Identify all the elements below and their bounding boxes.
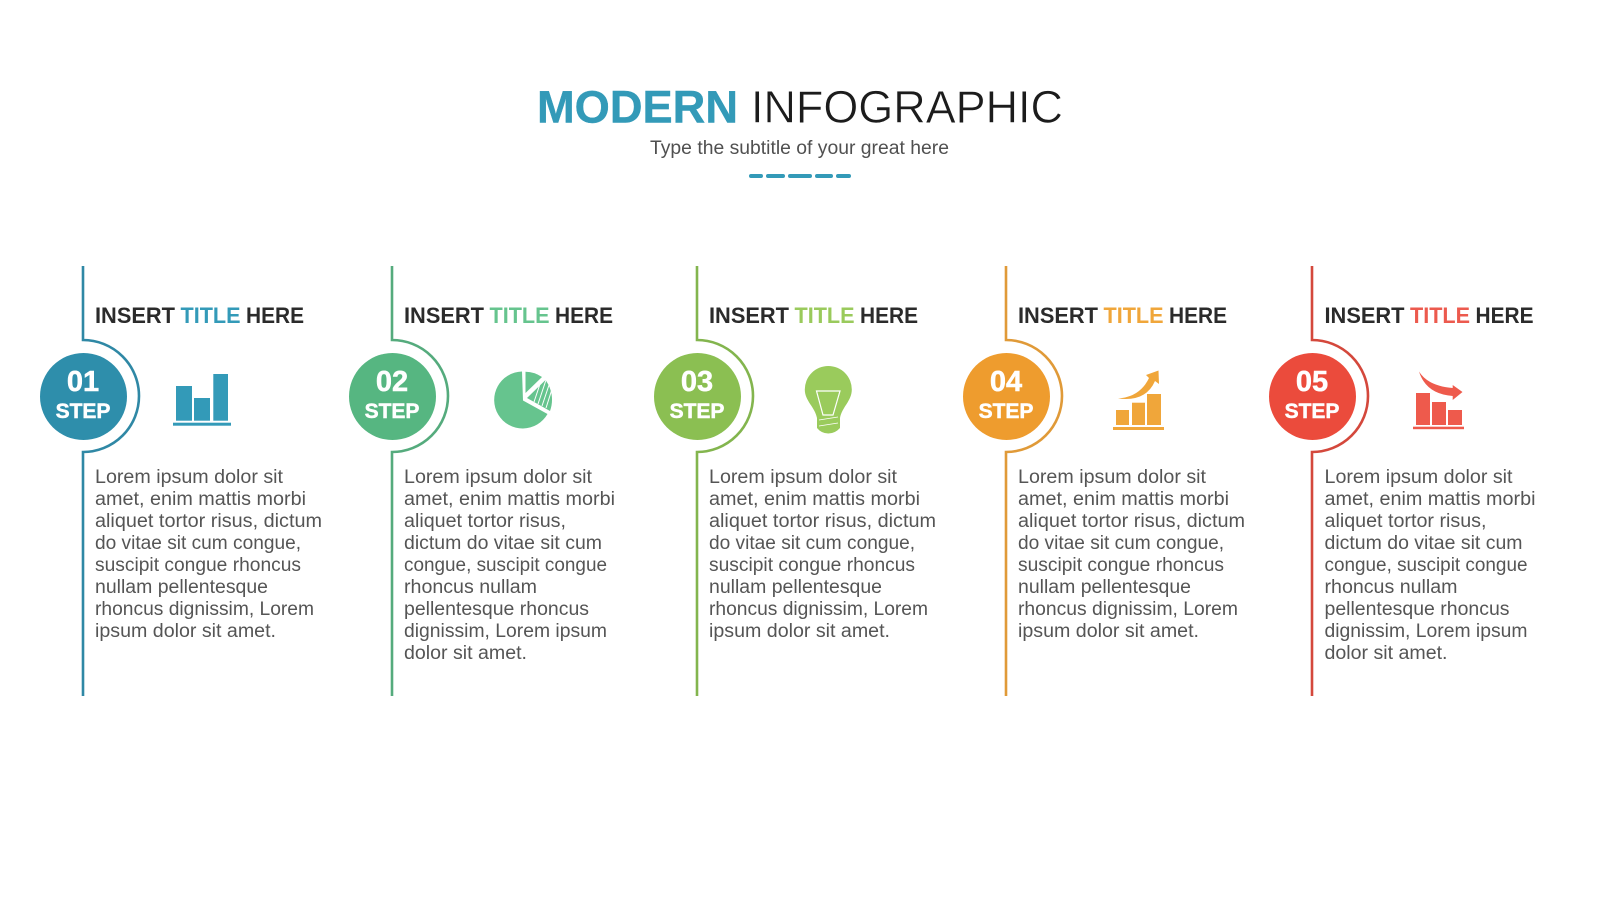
body text: dignissim, Lorem ipsum bbox=[1324, 621, 1528, 642]
step badge bbox=[1269, 353, 1356, 440]
icon: light bulb bbox=[805, 366, 852, 434]
panel: step 03 bbox=[654, 266, 936, 696]
body text: pellentesque rhoncus bbox=[404, 599, 589, 620]
step badge: 03 bbox=[681, 366, 713, 398]
icon: rising bar chart with arrow bbox=[1113, 370, 1164, 430]
panel: step 02 bbox=[349, 266, 615, 696]
heading: TITLE bbox=[794, 303, 854, 328]
heading: INSERT bbox=[1018, 303, 1099, 328]
body text: aliquet tortor risus, dictum bbox=[95, 511, 322, 532]
step badge bbox=[963, 353, 1050, 440]
title: INFOGRAPHIC bbox=[751, 82, 1063, 132]
body text bbox=[1324, 467, 1536, 664]
body text: rhoncus nullam bbox=[1324, 577, 1458, 598]
heading: INSERT bbox=[709, 303, 790, 328]
heading bbox=[404, 303, 613, 328]
body text: amet, enim mattis morbi bbox=[1324, 489, 1536, 510]
panel: step 05 bbox=[1269, 266, 1536, 696]
heading: INSERT bbox=[95, 303, 176, 328]
title: MODERN bbox=[537, 82, 738, 132]
body text: do vitae sit cum congue, bbox=[1018, 533, 1224, 554]
heading: INSERT bbox=[404, 303, 485, 328]
body text: amet, enim mattis morbi bbox=[95, 489, 306, 510]
heading: HERE bbox=[555, 303, 613, 328]
heading: HERE bbox=[860, 303, 918, 328]
heading: HERE bbox=[1169, 303, 1227, 328]
body text: ipsum dolor sit amet. bbox=[709, 621, 890, 642]
body text: aliquet tortor risus, bbox=[404, 511, 566, 532]
icon: bar chart bbox=[173, 374, 231, 426]
subtitle: Type the subtitle of your great here bbox=[650, 138, 949, 159]
body text bbox=[404, 467, 615, 664]
body text: aliquet tortor risus, dictum bbox=[1018, 511, 1245, 532]
step badge: STEP bbox=[365, 400, 419, 423]
body text: rhoncus dignissim, Lorem bbox=[1018, 599, 1238, 620]
step badge: 05 bbox=[1296, 366, 1328, 398]
timeline bracket bbox=[392, 266, 448, 696]
body text: aliquet tortor risus, bbox=[1324, 511, 1486, 532]
icon: falling bar chart with arrow bbox=[1413, 372, 1464, 429]
body text: dictum do vitae sit cum bbox=[404, 533, 602, 554]
body text: amet, enim mattis morbi bbox=[404, 489, 615, 510]
body text: Lorem ipsum dolor sit bbox=[95, 467, 284, 488]
title bbox=[537, 82, 1063, 132]
body text: Lorem ipsum dolor sit bbox=[1324, 467, 1513, 488]
timeline bracket bbox=[697, 266, 753, 696]
panel: step 01 bbox=[40, 266, 322, 696]
timeline bracket bbox=[83, 266, 139, 696]
body text: pellentesque rhoncus bbox=[1324, 599, 1510, 620]
body text: suscipit congue rhoncus bbox=[709, 555, 915, 576]
heading bbox=[1324, 303, 1534, 328]
body text: congue, suscipit congue bbox=[1324, 555, 1528, 576]
body text: dictum do vitae sit cum bbox=[1324, 533, 1522, 554]
body text bbox=[709, 467, 936, 642]
body text: dignissim, Lorem ipsum bbox=[404, 621, 607, 642]
body text: amet, enim mattis morbi bbox=[1018, 489, 1229, 510]
step badge: STEP bbox=[979, 400, 1033, 423]
timeline bracket bbox=[1006, 266, 1062, 696]
body text: congue, suscipit congue bbox=[404, 555, 607, 576]
body text: suscipit congue rhoncus bbox=[1018, 555, 1224, 576]
heading: HERE bbox=[246, 303, 304, 328]
body text: amet, enim mattis morbi bbox=[709, 489, 920, 510]
body text: dolor sit amet. bbox=[404, 643, 527, 664]
body text: nullam pellentesque bbox=[1018, 577, 1191, 598]
step badge: STEP bbox=[670, 400, 724, 423]
step badge bbox=[40, 353, 127, 440]
heading: INSERT bbox=[1324, 303, 1405, 328]
step badge: 02 bbox=[376, 366, 408, 398]
body text bbox=[1018, 467, 1245, 642]
heading: TITLE bbox=[180, 303, 240, 328]
body text: Lorem ipsum dolor sit bbox=[1018, 467, 1207, 488]
step badge: 01 bbox=[67, 366, 99, 398]
heading bbox=[95, 303, 304, 328]
body text: do vitae sit cum congue, bbox=[95, 533, 301, 554]
body text: rhoncus dignissim, Lorem bbox=[95, 599, 314, 620]
body text: aliquet tortor risus, dictum bbox=[709, 511, 936, 532]
step badge: STEP bbox=[1285, 400, 1339, 423]
body text: Lorem ipsum dolor sit bbox=[709, 467, 898, 488]
heading: TITLE bbox=[490, 303, 550, 328]
heading bbox=[1018, 303, 1227, 328]
body text: dolor sit amet. bbox=[1324, 643, 1448, 664]
timeline bracket bbox=[1312, 266, 1368, 696]
title dashes bbox=[749, 174, 851, 178]
body text: suscipit congue rhoncus bbox=[95, 555, 301, 576]
body text: Lorem ipsum dolor sit bbox=[404, 467, 593, 488]
icon: pie chart bbox=[494, 372, 553, 428]
body text: nullam pellentesque bbox=[95, 577, 268, 598]
body text: ipsum dolor sit amet. bbox=[95, 621, 276, 642]
heading: HERE bbox=[1476, 303, 1534, 328]
body text: rhoncus nullam bbox=[404, 577, 537, 598]
body text: nullam pellentesque bbox=[709, 577, 882, 598]
body text: do vitae sit cum congue, bbox=[709, 533, 915, 554]
step badge bbox=[654, 353, 741, 440]
heading bbox=[709, 303, 918, 328]
heading: TITLE bbox=[1410, 303, 1470, 328]
body text: ipsum dolor sit amet. bbox=[1018, 621, 1199, 642]
step badge bbox=[349, 353, 436, 440]
step badge: 04 bbox=[990, 366, 1022, 398]
heading: TITLE bbox=[1104, 303, 1164, 328]
panel: step 04 bbox=[963, 266, 1245, 696]
body text bbox=[95, 467, 322, 642]
body text: rhoncus dignissim, Lorem bbox=[709, 599, 928, 620]
step badge: STEP bbox=[56, 400, 110, 423]
